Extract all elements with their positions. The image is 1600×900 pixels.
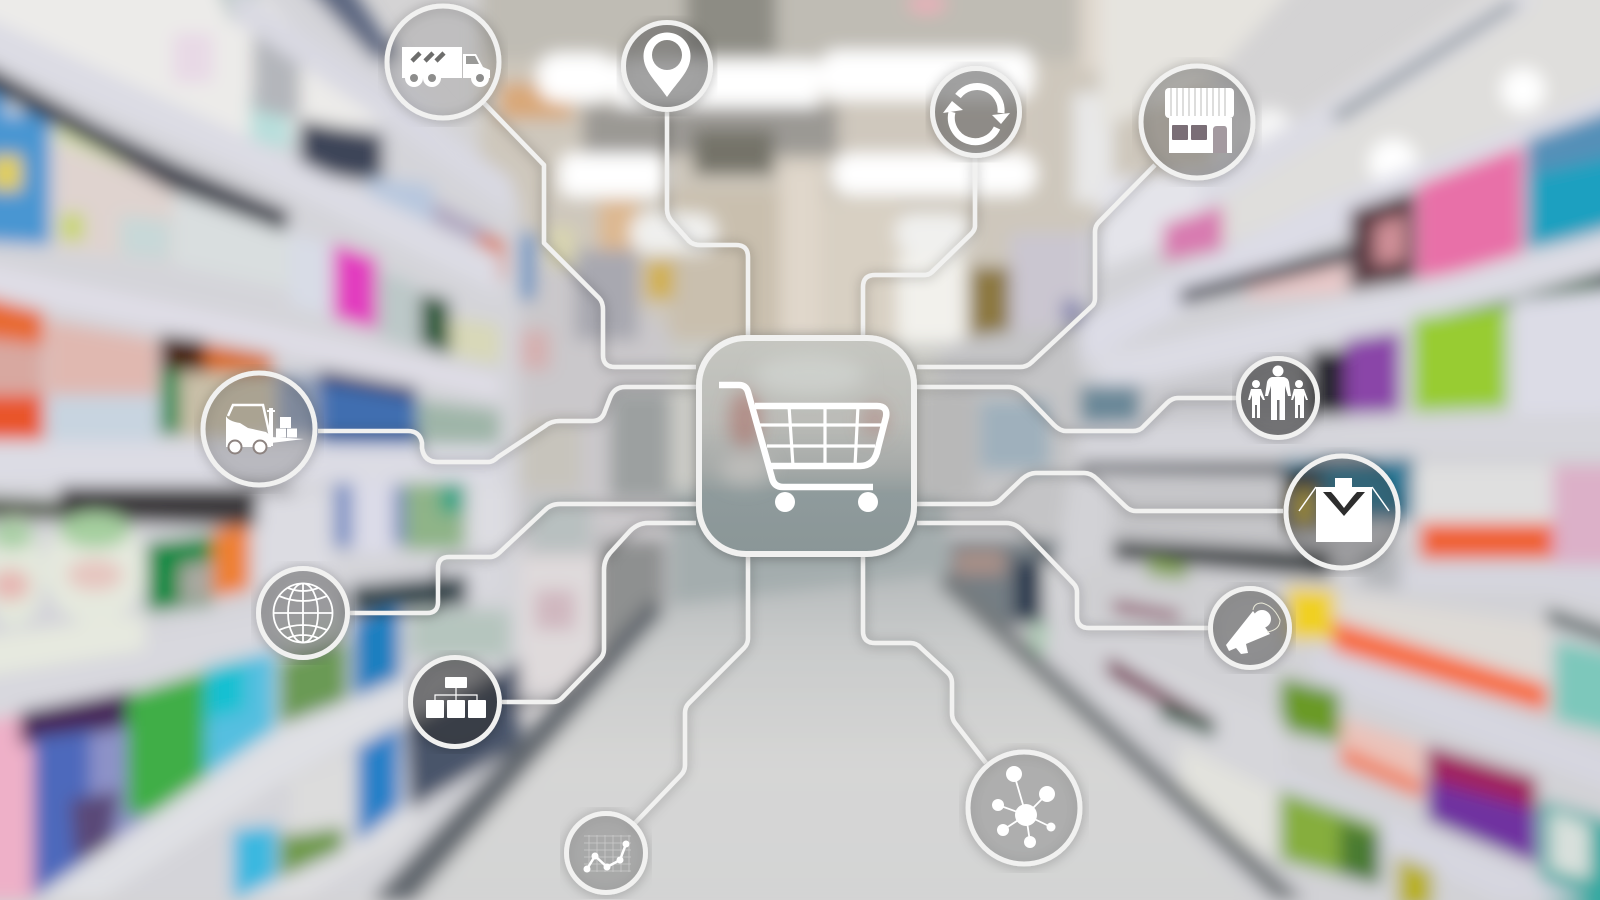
panel: rounded square <box>699 338 914 554</box>
connector: location pin <box>667 112 748 335</box>
left lip 1 with dark underside <box>0 50 290 232</box>
node: hub network <box>968 752 1080 864</box>
icon: shopping cart <box>719 385 886 512</box>
lights <box>537 50 1037 343</box>
far right shelves <box>917 320 1114 720</box>
far left shelves <box>408 200 674 720</box>
left base <box>0 0 520 900</box>
connector: refresh <box>863 158 975 335</box>
floor edge bands <box>370 600 665 900</box>
ceiling and far aisle <box>480 0 1247 605</box>
left lip 5 <box>30 675 415 900</box>
connector: shop <box>917 165 1155 367</box>
connector: hub network <box>863 557 986 763</box>
left row 2 products <box>0 290 44 445</box>
connector: org chart <box>502 523 696 702</box>
node: growth chart <box>566 814 646 892</box>
left row 4 products <box>0 712 38 900</box>
left lip 2 <box>0 258 500 398</box>
left row 1 products <box>0 75 50 245</box>
connector: globe <box>350 504 696 613</box>
node: megaphone <box>1210 588 1290 668</box>
left bottom products <box>233 825 277 900</box>
connector: truck <box>484 103 696 367</box>
connector: download <box>917 473 1283 511</box>
right third lip <box>1097 220 1600 395</box>
right fourth lip <box>1080 412 1600 460</box>
left lip 4 <box>0 555 505 725</box>
left upper shelf: pale packs <box>0 0 400 140</box>
node: download box <box>1286 456 1398 568</box>
node: location pin <box>624 22 710 110</box>
node: forklift <box>203 373 315 485</box>
right top rows <box>1190 0 1600 260</box>
right second lip <box>1080 80 1600 365</box>
icon nodes <box>203 6 1398 892</box>
right lower rows <box>1340 717 1423 800</box>
node: refresh <box>932 68 1020 156</box>
node: shop <box>1141 66 1253 178</box>
left top dark region behind lip <box>290 0 400 60</box>
connector: megaphone <box>917 523 1211 628</box>
connector: chart <box>635 557 748 823</box>
left lip 3 zone and dark underside <box>0 440 500 484</box>
right lavender band <box>1313 642 1600 800</box>
connector: forklift <box>318 387 696 462</box>
right row: dark, pink, teal <box>1247 250 1347 300</box>
connector network <box>318 103 1283 823</box>
node: delivery truck <box>387 6 499 118</box>
panel: frosted colour hints <box>720 355 889 486</box>
right row: purple, green, white <box>1080 350 1330 430</box>
right row: yellow, red diag <box>1080 565 1290 650</box>
floor <box>393 573 1290 900</box>
central cart panel <box>699 338 914 554</box>
left row 3 products <box>0 517 44 627</box>
left upper lip <box>233 0 513 215</box>
right base <box>1040 0 1600 900</box>
right row: orange stripe <box>1080 463 1290 475</box>
node: globe <box>258 568 348 658</box>
node: family <box>1238 358 1318 438</box>
connector: family <box>917 387 1237 431</box>
node: org chart <box>410 658 500 746</box>
